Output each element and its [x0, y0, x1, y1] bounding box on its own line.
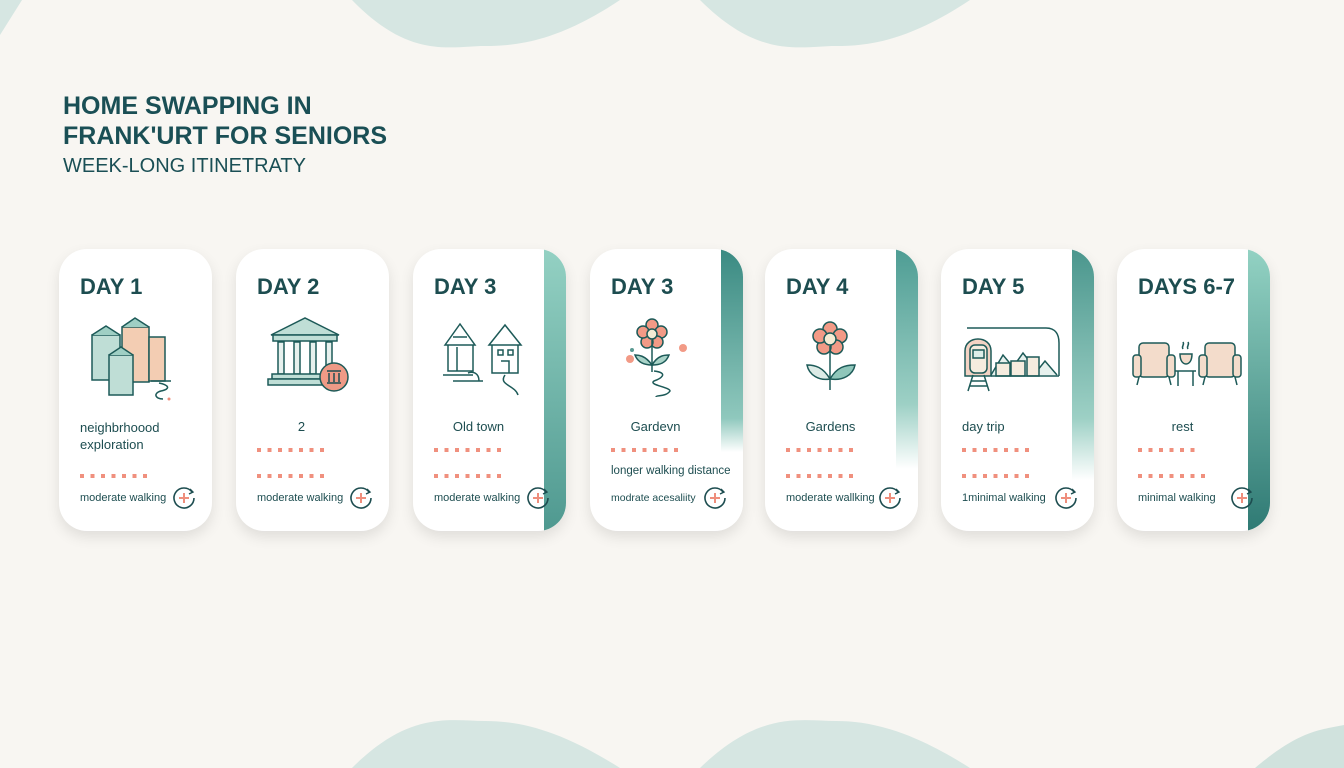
card: days 6-7 — [1117, 249, 1270, 531]
label: neighbrhoood — [80, 420, 160, 435]
card: day 4 — [765, 249, 918, 531]
label: Old town — [453, 419, 504, 434]
title — [63, 92, 387, 150]
heading: days 6-7: DAYS 6-7 — [1138, 274, 1235, 299]
icon: plus circle — [173, 487, 195, 509]
card: day 5 — [941, 249, 1094, 531]
icon: plus circle — [350, 487, 372, 509]
icon: armchairs and tea — [1132, 342, 1242, 386]
card: day 1 — [59, 249, 212, 531]
label: day trip — [962, 419, 1005, 434]
card: day 3 old town — [413, 249, 566, 531]
note: modrate acesaliity — [611, 492, 696, 504]
label: Gardevn — [631, 419, 680, 434]
icon: plus circle — [704, 487, 726, 509]
icon: old town houses — [443, 322, 522, 396]
title: FRANK'URT FOR SENIORS — [63, 122, 387, 150]
heading: day 3: DAY 3 — [434, 274, 496, 299]
icon: museum — [267, 317, 349, 392]
card: day 3 garden — [590, 249, 743, 531]
note: moderate wallking — [786, 492, 875, 504]
note: moderate walking — [434, 492, 520, 504]
note: moderate walking — [80, 492, 166, 504]
label: 2 — [298, 419, 305, 434]
label: rest — [1172, 419, 1193, 434]
icon: plus circle — [1055, 487, 1077, 509]
icon: flower — [806, 321, 856, 390]
note: moderate walking — [257, 492, 343, 504]
icon: flower with path — [626, 318, 687, 397]
title: HOME SWAPPING IN — [63, 92, 312, 120]
note: 1minimal walking — [962, 492, 1046, 504]
icon: plus circle — [527, 487, 549, 509]
heading: day 4: DAY 4 — [786, 274, 848, 299]
icon: buildings — [91, 317, 171, 400]
label: Gardens — [806, 419, 855, 434]
icon: plus circle — [879, 487, 901, 509]
note: longer walking distance — [611, 465, 731, 477]
subtitle: WEEK-LONG ITINETRATY — [63, 155, 306, 177]
label — [80, 420, 160, 452]
icon: plus circle — [1231, 487, 1253, 509]
heading: day 1: DAY 1 — [80, 274, 142, 299]
label: exploration — [80, 437, 144, 452]
heading: day 2: DAY 2 — [257, 274, 319, 299]
note: minimal walking — [1138, 492, 1216, 504]
card: day 2 — [236, 249, 389, 531]
heading: day 3: DAY 3 — [611, 274, 673, 299]
icon: train and mountains — [964, 327, 1060, 392]
heading: day 5: DAY 5 — [962, 274, 1024, 299]
